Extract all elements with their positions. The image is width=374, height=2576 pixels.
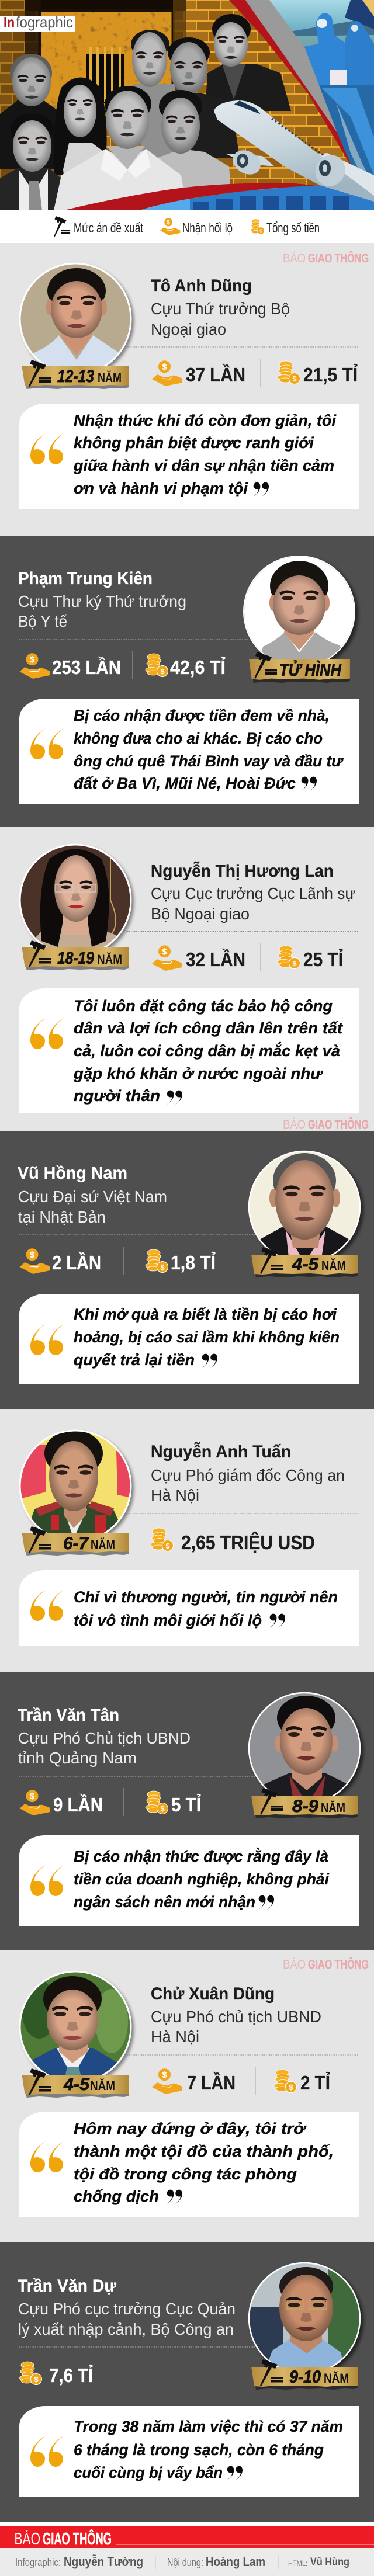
sentence badge: NĂM (98, 370, 122, 385)
footer logo band (0, 2526, 374, 2549)
portrait photo (248, 1692, 363, 1807)
portrait: man with glasses (header) (131, 30, 175, 158)
icon: coins (146, 1249, 168, 1272)
quote: ơn và hành vi phạm tội (74, 480, 248, 497)
sentence badge: 18-19 (57, 949, 94, 968)
role: lý xuất nhập cảnh, Bộ Công an (18, 2320, 234, 2338)
quote: không đưa cho ai khác. Bị cáo cho (74, 730, 323, 747)
name: Trần Văn Tân (18, 1706, 119, 1725)
quote (19, 1294, 359, 1384)
footer credits: Nội dung: (167, 2557, 203, 2568)
panel: Chử Xuân Dũng (0, 1950, 374, 2242)
icon: coins (274, 2070, 297, 2092)
role: Cựu Phó giám đốc Công an (151, 1466, 345, 1484)
panel: Phạm Trung Kiên (0, 536, 374, 827)
quote: dân và lợi ích công dân lên trên tất (74, 1019, 343, 1037)
quote: giữa hành vi dân sự nhận tiền cảm (73, 457, 334, 474)
portrait photo (248, 2262, 363, 2377)
role: tại Nhật Bản (18, 1208, 106, 1226)
sentence badge (251, 1247, 358, 1277)
quote (19, 404, 359, 509)
icon: bribe hand (152, 360, 182, 386)
diagonal band: red (229, 0, 353, 169)
stat: times: 32 LẦN (186, 949, 245, 970)
quote: tội đồ trong công tác phòng (74, 2165, 297, 2183)
sentence badge: NĂM (321, 1258, 346, 1273)
portrait photo (19, 844, 134, 959)
stat: amount: 42,6 TỈ (170, 657, 226, 678)
quote (19, 1570, 359, 1646)
footer credits: Infographic: (15, 2557, 61, 2568)
icon: coins (146, 1791, 168, 1814)
role: Hà Nội (151, 1486, 199, 1504)
photo: repatriation flight, upper right (269, 0, 374, 175)
footer logo band: GIAO THÔNG (43, 2529, 112, 2549)
sentence badge: 8-9 (292, 1797, 318, 1816)
quote: không phân biệt được ranh giới (74, 434, 314, 452)
role: Cựu Cục trưởng Cục Lãnh sự (151, 884, 355, 902)
sentence badge: 4-5 (63, 2075, 90, 2094)
quote: ông chú quê Thái Bình vay và đầu tư (74, 752, 344, 770)
icon: coins (146, 654, 168, 676)
quote: hoảng, bị cáo sai lầm khi không kiên (74, 1328, 340, 1346)
role: Bộ Y tế (18, 612, 67, 630)
quote: tiền của doanh nghiệp, không phải (74, 1870, 329, 1888)
legend label: bribes: Nhận hối lộ (182, 220, 233, 235)
icon: gavel (54, 216, 70, 237)
portrait: Tô Anh Dũng (header) (54, 86, 187, 210)
quote: Hôm nay đứng ở đây, tôi trở (74, 2120, 307, 2137)
stat: times: 37 LẦN (186, 364, 245, 386)
role (151, 884, 355, 923)
door window bars (86, 47, 124, 103)
quote: Tôi luôn đặt công tác bảo hộ công (74, 997, 333, 1015)
footer credits (0, 2548, 374, 2576)
legend (54, 216, 320, 237)
footer credits: Vũ Hùng (310, 2556, 349, 2568)
quote: ngân sách nên mới nhận (74, 1893, 255, 1911)
tag: Infographic: fographic (16, 13, 73, 31)
portrait photo (19, 263, 134, 377)
watermark (283, 251, 369, 265)
role: Bộ Ngoại giao (151, 905, 250, 923)
watermark: BÁO (283, 1958, 306, 1971)
quote: cuối cùng bị vấy bẩn (74, 2464, 223, 2481)
legend label: total: Tổng số tiền (266, 220, 320, 235)
name: Phạm Trung Kiên (18, 569, 153, 588)
quote (19, 988, 359, 1113)
quote: 6 tháng là trong sạch, còn 6 tháng (74, 2441, 324, 2459)
role: Cựu Phó chủ tịch UBND (151, 2008, 321, 2026)
stat: amount: 1,8 TỈ (171, 1252, 216, 1273)
role (151, 1466, 345, 1504)
quote (19, 2112, 359, 2217)
quote: thành một tội đồ của thành phố, (74, 2143, 334, 2160)
sentence badge (22, 360, 129, 389)
icon: coins (19, 2362, 42, 2384)
sentence badge: NĂM (91, 1537, 115, 1552)
footer credits: HTML: (288, 2558, 307, 2568)
sentence badge: NĂM (90, 2078, 115, 2093)
portrait photo (248, 1151, 363, 1265)
watermark: BÁO (283, 252, 306, 265)
quote: Trong 38 năm làm việc thì có 37 năm (74, 2418, 343, 2435)
stat: times: 7 LẦN (187, 2072, 236, 2094)
name: Vũ Hồng Nam (18, 1164, 127, 1183)
icon: coins (278, 361, 300, 384)
quote: Khi mở quà ra biết là tiền bị cáo hơi (74, 1306, 337, 1323)
footer logo band: BÁO (14, 2529, 40, 2549)
stat: amount: 5 TỈ (171, 1794, 201, 1815)
footer credits: Nguyễn Tường (64, 2554, 143, 2569)
sentence badge (251, 2359, 358, 2390)
quote: Nhận thức khi đó còn đơn giản, tôi (74, 412, 336, 429)
stat: amount: 25 TỈ (303, 949, 343, 970)
panel: Trần Văn Tân (0, 1672, 374, 1950)
sentence badge: 12-13 (57, 367, 94, 386)
icon: bribe hand (20, 653, 50, 679)
sentence badge: 9-10 (289, 2367, 321, 2387)
sentence badge (22, 1526, 129, 1556)
panel: Vũ Hồng Nam (0, 1131, 374, 1409)
stat: times: 253 LẦN (52, 657, 121, 678)
portrait photo (243, 556, 358, 670)
role: Cựu Đại sứ Việt Nam (18, 1188, 167, 1206)
icon: hand with coin (160, 218, 180, 235)
stat: times: 9 LẦN (53, 1794, 103, 1815)
role (151, 2008, 321, 2046)
sentence badge: TỬ HÌNH (279, 659, 342, 680)
tag: Infographic (0, 16, 75, 32)
icon: bribe hand (20, 1790, 50, 1815)
panel: Trần Văn Dự (0, 2242, 374, 2522)
wall shading (0, 0, 39, 178)
sentence badge: 6-7 (63, 1534, 89, 1553)
portrait: Chử Xuân Dũng (header) (0, 113, 61, 210)
quote: chống dịch (74, 2188, 159, 2205)
watermark: BÁO (283, 1118, 306, 1131)
role: tỉnh Quảng Nam (18, 1749, 137, 1767)
role: Cựu Phó cục trưởng Cục Quản (18, 2300, 236, 2318)
role: Cựu Thư ký Thứ trưởng (18, 592, 186, 610)
portrait: Nguyễn Thị Hương Lan (header) (54, 77, 107, 181)
panel: Tô Anh Dũng (0, 243, 374, 536)
quote: người thân (74, 1087, 160, 1105)
role: Cựu Thứ trưởng Bộ (151, 300, 290, 318)
role (18, 2300, 236, 2338)
stat: amount: 7,6 TỈ (49, 2365, 93, 2386)
name: Chử Xuân Dũng (151, 1984, 275, 2004)
footer credits: Hoàng Lam (206, 2554, 265, 2569)
sentence badge (249, 652, 350, 683)
role (18, 1729, 191, 1767)
blue passenger photo strip (140, 185, 374, 210)
role: Hà Nội (151, 2028, 199, 2046)
sentence badge (251, 1788, 358, 1818)
portrait: Trần Văn Tân (header) (205, 14, 291, 111)
diagonal band: grey (245, 0, 337, 133)
quote: tôi vô tình môi giới hối lộ (74, 1612, 262, 1629)
rusty door (25, 0, 186, 117)
role (18, 592, 186, 630)
stat: times: 2 LẦN (52, 1252, 101, 1273)
icon: bribe hand (152, 2068, 182, 2094)
role (18, 1188, 167, 1226)
legend label: sentence: Mức án đề xuất (74, 220, 143, 235)
icon: coins (278, 946, 300, 968)
role (151, 300, 290, 338)
header illustration (0, 0, 374, 210)
airplane (214, 100, 374, 202)
sentence badge: NĂM (97, 952, 122, 967)
icon: bribe hand (20, 1248, 50, 1274)
quote: Bị cáo nhận được tiền đem về nhà, (74, 707, 330, 724)
name: Nguyễn Thị Hương Lan (151, 861, 334, 881)
stat: amount: 2 TỈ (300, 2072, 330, 2094)
quote (19, 699, 359, 804)
name: Nguyễn Anh Tuấn (151, 1442, 291, 1461)
watermark (283, 1957, 369, 1971)
quote: Bị cáo nhận thức được rằng đây là (74, 1847, 328, 1865)
role: Ngoại giao (151, 320, 226, 338)
watermark (283, 1117, 369, 1131)
tag: Infographic: In (4, 13, 15, 31)
sentence badge: 4-5 (292, 1255, 319, 1274)
quote: quyết trả lại tiền (74, 1351, 195, 1369)
role: Cựu Phó Chủ tịch UBND (18, 1729, 191, 1747)
sentence badge: NĂM (324, 2371, 349, 2386)
sentence badge: NĂM (321, 1800, 345, 1815)
stat: amount: 2,65 TRIỆU USD (181, 1532, 315, 1553)
quote (19, 1835, 359, 1926)
portrait photo (19, 1971, 134, 2085)
brick wall (0, 0, 349, 200)
quote: gặp khó khăn ở nước ngoài như (73, 1065, 324, 1082)
panel: Nguyễn Anh Tuấn (0, 1409, 374, 1672)
sentence badge (22, 940, 129, 970)
portrait: Nguyễn Anh Tuấn (header) (168, 37, 240, 158)
stat: amount: 21,5 TỈ (303, 364, 358, 386)
quote: đất ở Ba Vì, Mũi Né, Hoài Đức (74, 775, 296, 792)
portrait photo (19, 1430, 134, 1544)
quote: cả, luôn coi công dân bị mắc kẹt và (74, 1041, 340, 1060)
icon: bribe hand (152, 945, 182, 971)
portrait: Phạm Trung Kiên (header) (158, 90, 231, 199)
red swoosh (64, 183, 316, 210)
quote (19, 2406, 359, 2497)
name: Trần Văn Dự (18, 2276, 116, 2296)
quote: Chỉ vì thương người, tin người nên (74, 1588, 338, 1606)
panel: Nguyễn Thị Hương Lan (0, 827, 374, 1131)
icon: coins (151, 1528, 173, 1551)
sentence badge (22, 2068, 129, 2098)
portrait: Vũ Hồng Nam (header) (0, 54, 61, 169)
name: Tô Anh Dũng (151, 276, 252, 296)
icon: coins (251, 219, 264, 234)
